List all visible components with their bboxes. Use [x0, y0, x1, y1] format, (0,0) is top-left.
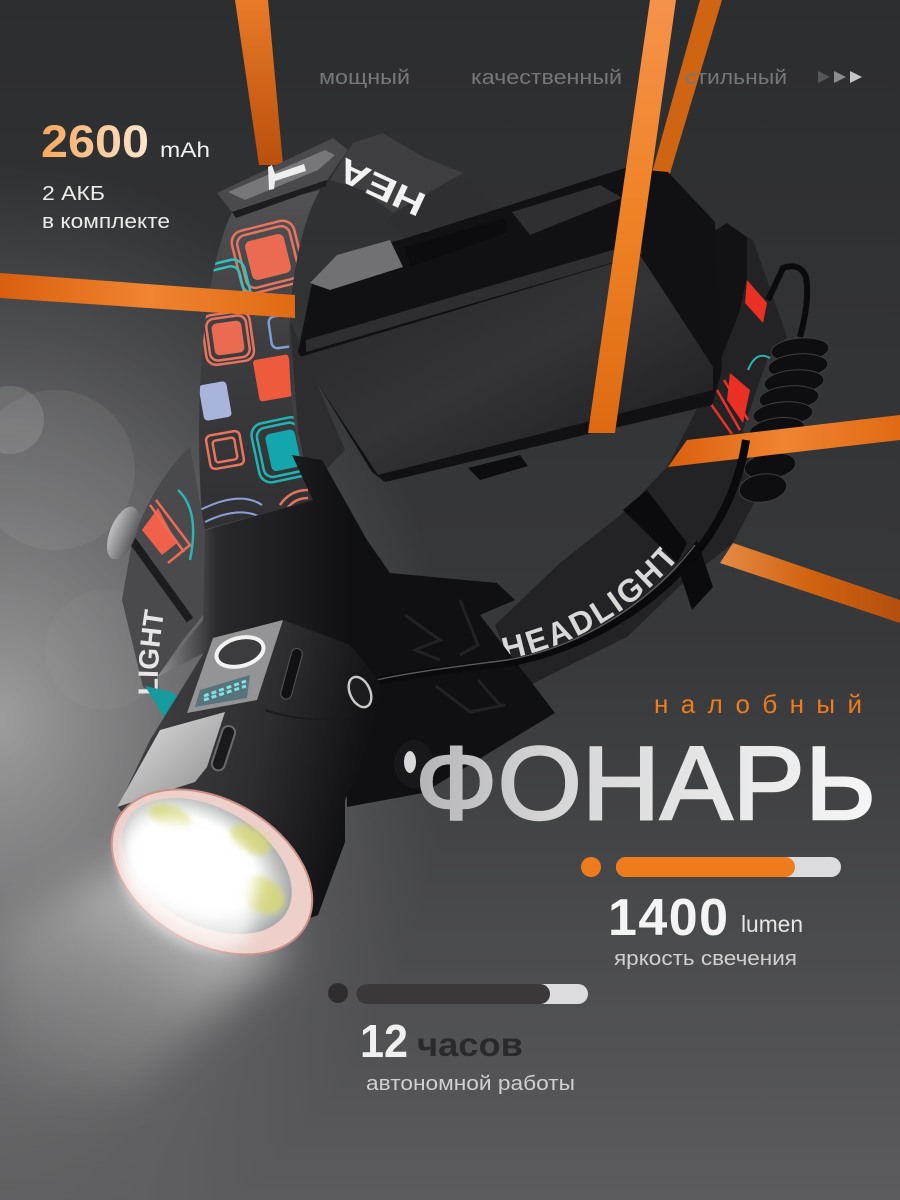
- lower left strap with LIGHT lettering: LIGHT: [138, 609, 163, 694]
- lower left strap with LIGHT lettering: [122, 448, 205, 694]
- runtime stat: часов: [417, 1026, 523, 1063]
- runtime bar: [328, 983, 588, 1004]
- battery capacity stat: в комплекте: [42, 211, 170, 233]
- band clips and cable: [370, 440, 746, 683]
- central glare: [108, 801, 272, 935]
- lower slot: [210, 724, 237, 772]
- battery face: [300, 255, 713, 475]
- top tagline: [319, 67, 787, 89]
- light beam: [0, 860, 290, 1100]
- battery capacity stat: 2 АКБ: [42, 183, 105, 205]
- coiled cable: [737, 266, 830, 505]
- lamp head: [82, 620, 380, 988]
- light top facet: [117, 712, 225, 807]
- orange strip: left: [0, 273, 295, 318]
- right strap with HEADLIGHT lettering: HEADLIGHT: [502, 546, 675, 656]
- arrows: [818, 71, 862, 83]
- battery capacity stat: 2600: [41, 116, 149, 167]
- right strap with HEADLIGHT lettering: [495, 223, 787, 684]
- brightness stat: 1400: [608, 889, 728, 947]
- brightness stat: яркость свечения: [614, 948, 797, 970]
- battery lip: [306, 242, 642, 352]
- lens: [98, 770, 316, 962]
- brightness stat: lumen: [741, 911, 803, 937]
- orange strip: top: [235, 0, 283, 165]
- cable connector: [344, 673, 376, 711]
- inner strap edge: [290, 320, 345, 490]
- battery top rail: [512, 185, 622, 235]
- runtime stat: [360, 1015, 575, 1095]
- rear strap with coloured squares: [197, 190, 320, 530]
- top tagline: стильный: [685, 67, 787, 89]
- upper slot: [279, 647, 304, 700]
- LED yellow spots: [146, 799, 291, 922]
- bezel: [82, 756, 342, 988]
- battery clip: [405, 218, 508, 266]
- lamp body: [118, 620, 380, 945]
- top strap with HEAD lettering: HEA: [332, 150, 431, 223]
- runtime stat: автономной работы: [366, 1073, 575, 1095]
- display panel: [187, 620, 283, 713]
- brightness stat: [608, 889, 803, 970]
- LCD display: [195, 675, 250, 707]
- power button ring: [213, 632, 267, 672]
- orange strip: lower right: [720, 543, 900, 623]
- runtime stat: 12: [360, 1015, 408, 1067]
- strap teal detail: [145, 686, 190, 724]
- brightness bar: [581, 857, 841, 877]
- buckle: [217, 138, 348, 218]
- subtitle: налобный: [654, 689, 862, 719]
- battery capacity stat: [41, 116, 210, 233]
- top tagline: мощный: [319, 67, 410, 89]
- side knob: [100, 502, 146, 564]
- orange strip: right: [668, 415, 900, 467]
- battery bottom tab: [468, 455, 528, 480]
- rear section line: [265, 710, 350, 719]
- orange strip: behind battery: [650, 0, 722, 180]
- lens flare circles: [0, 386, 165, 710]
- top tagline: качественный: [471, 67, 622, 89]
- pivot screw: [394, 740, 434, 788]
- battery box: [298, 168, 722, 482]
- battery housing highlight: [310, 240, 403, 290]
- orange strip: main vertical: [588, 0, 676, 433]
- top strap with HEAD lettering: [330, 133, 500, 247]
- bezel glow: [109, 830, 271, 970]
- headlamp strap assembly: [107, 133, 787, 694]
- mount ridges: [405, 600, 505, 712]
- head plate: [157, 455, 555, 807]
- battery capacity stat: mAh: [160, 139, 210, 162]
- title: ФОНАРЬ: [415, 726, 876, 842]
